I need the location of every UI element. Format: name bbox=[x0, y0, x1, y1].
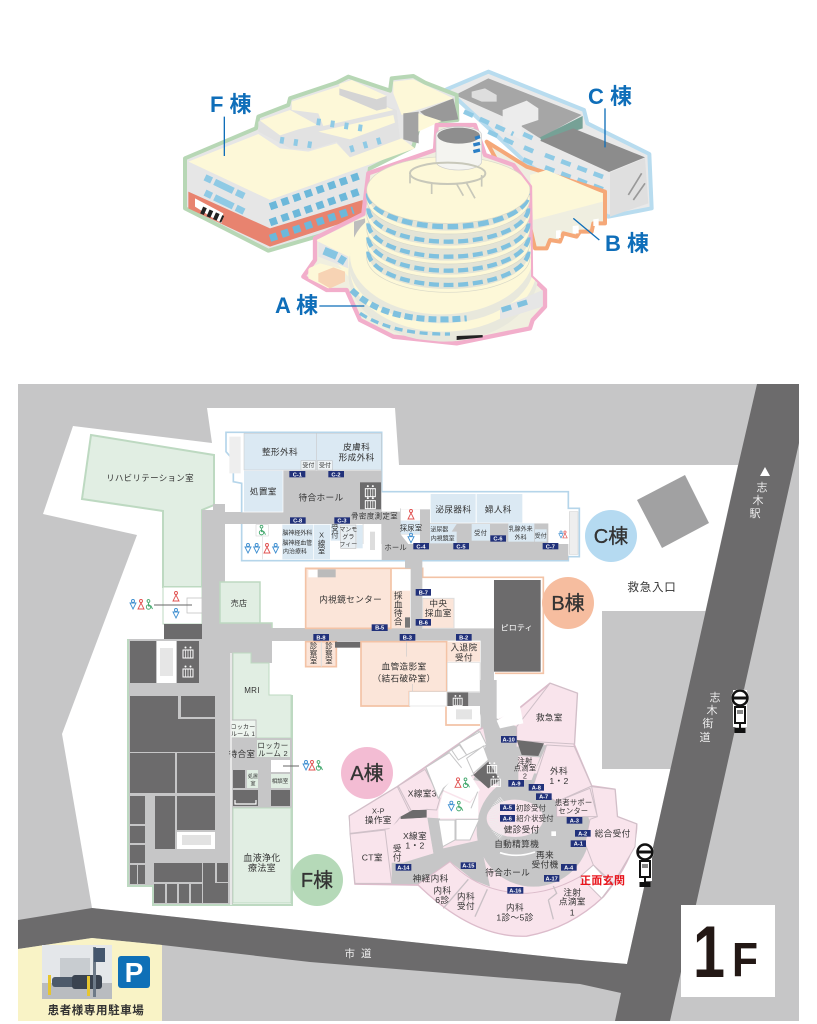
room: x-ray 3 bbox=[398, 769, 440, 812]
label: B wing: B 棟 bbox=[605, 231, 649, 256]
badge: C wing: C棟 bbox=[594, 525, 628, 548]
location labels: A-2 bbox=[578, 831, 587, 837]
badge: C wing bbox=[585, 510, 637, 562]
exam rooms: 診 bbox=[325, 641, 333, 650]
station direction: 木 bbox=[752, 494, 764, 507]
location labels: B-7 bbox=[419, 590, 428, 596]
location labels: C-2 bbox=[331, 472, 341, 478]
location labels: B-5 bbox=[375, 626, 384, 632]
room: orthopedics: 整形外科 bbox=[262, 446, 298, 457]
room: blood draw waiting: 合 bbox=[394, 616, 403, 627]
label: A wing: A 棟 bbox=[275, 293, 318, 318]
floor indicator bbox=[681, 905, 775, 997]
station direction: 志 bbox=[756, 481, 768, 494]
road name: city road: 市道 bbox=[344, 947, 378, 960]
room: central blood collection: 採血室 bbox=[425, 607, 452, 618]
exam rooms bbox=[306, 641, 362, 667]
badge: A wing bbox=[341, 747, 393, 799]
location labels: C-4 bbox=[416, 544, 426, 550]
waiting area bbox=[228, 738, 292, 808]
room: mammography and reception: マンモ bbox=[339, 526, 357, 533]
room labels in hall: 神経内科 bbox=[413, 872, 449, 883]
room labels in hall: 待合ホール bbox=[485, 866, 530, 877]
location labels: C-8 bbox=[293, 519, 302, 525]
building illustration bbox=[185, 72, 652, 343]
room: urology endoscopy bbox=[430, 524, 457, 543]
room: X-P control: X-P bbox=[372, 806, 385, 815]
rehabilitation room bbox=[82, 435, 214, 587]
room: central blood collection: 中央 bbox=[429, 598, 447, 609]
floor map background bbox=[18, 384, 799, 1021]
stairs east bbox=[569, 512, 578, 554]
reception bbox=[472, 524, 490, 541]
dialysis room: 療法室 bbox=[248, 862, 276, 873]
consultation room: 相談室 bbox=[272, 777, 289, 785]
location labels: A-9 bbox=[511, 781, 521, 787]
badge: A wing: A棟 bbox=[350, 762, 384, 785]
room: urology endoscopy: 内視鏡室 bbox=[431, 534, 455, 542]
room: X-P control bbox=[349, 787, 410, 833]
elevators bbox=[183, 646, 193, 677]
room labels in hall: 自動精算機 bbox=[494, 838, 539, 849]
room: X-P control: 操作室 bbox=[365, 814, 392, 825]
room: central blood collection bbox=[423, 598, 454, 628]
restrooms south bbox=[271, 760, 322, 772]
floor indicator: 1 bbox=[693, 912, 725, 993]
room: endoscopy center: 内視鏡センター bbox=[319, 593, 382, 604]
location labels: C-1 bbox=[293, 472, 302, 478]
panel: F wing bbox=[82, 435, 405, 905]
corridor bbox=[128, 504, 405, 905]
room labels in hall: 健診受付 bbox=[504, 823, 540, 834]
hall label: ホール bbox=[384, 543, 407, 552]
outdoor annex block bbox=[637, 475, 709, 548]
room: neurosurgery: 脳神経血管 bbox=[282, 539, 312, 547]
stairs bbox=[157, 641, 215, 849]
reception desks: 受付 bbox=[302, 462, 314, 470]
station direction: 駅 bbox=[750, 507, 760, 520]
room: blood draw waiting bbox=[392, 590, 410, 628]
room: surgery: 外科 bbox=[550, 765, 568, 776]
room: mammography and reception: 受 bbox=[331, 524, 339, 533]
location labels: A-8 bbox=[532, 785, 541, 791]
rehabilitation room: リハビリテーション室 bbox=[106, 473, 194, 483]
corridors bbox=[290, 560, 494, 730]
location labels bbox=[396, 736, 591, 894]
location labels: A-3 bbox=[570, 818, 579, 824]
room: general reception: 総合受付 bbox=[595, 827, 631, 838]
road name: Shiki Kaido: 道 bbox=[700, 730, 710, 744]
room: dermatology bbox=[317, 433, 381, 470]
room: x-ray bbox=[314, 525, 330, 559]
exam rooms: 室 bbox=[310, 657, 317, 666]
icon: traffic signal 1 bbox=[731, 689, 749, 733]
room: angiography: （結石破砕室） bbox=[373, 672, 435, 683]
room: breast surgery: 外科 bbox=[515, 533, 527, 541]
elevator and stairs bbox=[446, 692, 481, 725]
room: emergency bbox=[497, 683, 577, 744]
road name: Shiki Kaido bbox=[700, 691, 720, 744]
restrooms bbox=[438, 765, 480, 818]
room: mammography and reception: 付 bbox=[331, 531, 339, 540]
location labels: B-2 bbox=[459, 635, 468, 641]
building F illustration bbox=[185, 76, 458, 251]
building C illustration bbox=[447, 72, 652, 217]
location labels: B-8 bbox=[316, 635, 326, 641]
room: surgery: 1・2 bbox=[549, 776, 569, 786]
room: blood draw waiting: 待 bbox=[394, 607, 403, 618]
leader lines bbox=[224, 108, 605, 306]
room: x-ray: 線 bbox=[318, 539, 326, 548]
restrooms west bbox=[243, 525, 282, 559]
exam rooms: 察 bbox=[325, 649, 333, 658]
room: injection 2: 2 bbox=[523, 771, 527, 780]
room: gynecology: 婦人科 bbox=[485, 504, 512, 515]
room: neurosurgery bbox=[282, 525, 313, 559]
location labels: A-4 bbox=[564, 865, 574, 871]
room: x-ray 1 and 2 bbox=[400, 818, 433, 862]
room: patient support center: センター bbox=[558, 807, 588, 816]
locker room 1: ロッカー bbox=[230, 724, 256, 731]
room: blood draw waiting: 採 bbox=[394, 590, 403, 601]
room: x-ray: X bbox=[319, 531, 324, 540]
room: admissions: 受付 bbox=[455, 651, 473, 662]
main entrance bbox=[580, 865, 625, 898]
room: injection 2: 点滴室 bbox=[514, 764, 536, 773]
location labels: A-7 bbox=[539, 795, 548, 801]
elevators bbox=[473, 762, 500, 788]
room labels in hall: 初診受付 bbox=[516, 803, 546, 812]
restrooms north bbox=[130, 587, 202, 639]
lower ring of rooms bbox=[418, 862, 603, 936]
room labels in hall: 内科 bbox=[457, 891, 475, 902]
reception desks: 受付 bbox=[319, 462, 331, 470]
room: breast surgery: 乳腺外来 bbox=[509, 525, 533, 533]
location labels: C-3 bbox=[337, 519, 347, 525]
restroom and urine room bbox=[400, 509, 422, 544]
building A illustration bbox=[303, 125, 545, 343]
room: urology bbox=[431, 494, 476, 523]
room labels in hall: 1診〜5診 bbox=[496, 912, 534, 923]
label: F wing: F 棟 bbox=[210, 92, 252, 117]
floor indicator: F bbox=[732, 934, 758, 987]
restroom and urine room: 採尿室 bbox=[400, 523, 422, 532]
parking sign bbox=[118, 956, 150, 988]
badge: F wing bbox=[291, 854, 343, 906]
parking area bbox=[18, 938, 162, 1021]
elevators bbox=[360, 482, 381, 509]
dialysis room: 血液浄化 bbox=[243, 852, 281, 863]
location labels: A-6 bbox=[503, 816, 512, 822]
label: C wing: C 棟 bbox=[588, 84, 632, 109]
room: mammography and reception: グラ bbox=[342, 533, 354, 541]
location labels: A-15 bbox=[462, 864, 474, 870]
dark room bbox=[401, 810, 427, 819]
gray corridors bbox=[225, 471, 568, 560]
locker room 2: ロッカー bbox=[257, 741, 289, 750]
MRI room: MRI bbox=[244, 686, 260, 695]
room: reception: 受 bbox=[393, 842, 402, 853]
locker room 2 bbox=[257, 740, 290, 758]
room: injection 2: 注射 bbox=[517, 756, 533, 765]
room: urology: 泌尿器科 bbox=[435, 504, 471, 515]
locker room 1: ルーム 1 bbox=[231, 731, 256, 738]
outer outline bbox=[391, 568, 543, 673]
room: orthopedics bbox=[244, 433, 317, 470]
room: breast surgery bbox=[508, 523, 534, 542]
white room bbox=[447, 663, 480, 692]
stairs bbox=[363, 524, 381, 559]
dialysis room bbox=[233, 808, 291, 903]
room: CT: CT室 bbox=[362, 851, 383, 862]
room: x-ray: 室 bbox=[318, 547, 325, 556]
panel: A wing bbox=[349, 680, 637, 936]
location labels: A-14 bbox=[397, 865, 410, 871]
room labels in hall: 受付 bbox=[457, 900, 475, 911]
shop bbox=[220, 582, 272, 628]
reception desks bbox=[301, 461, 332, 470]
room labels in hall: 内科 bbox=[506, 902, 524, 913]
exam rooms: 室 bbox=[325, 657, 333, 666]
road name: Shiki Kaido: 街 bbox=[702, 716, 714, 730]
outer outline bbox=[349, 683, 637, 936]
badge: B wing: B棟 bbox=[551, 592, 585, 615]
room: mammography and reception: フィー bbox=[339, 541, 357, 548]
room: reception bbox=[386, 820, 403, 863]
badge: B wing bbox=[542, 577, 594, 629]
location labels bbox=[313, 589, 472, 641]
room: urology endoscopy: 泌尿器 bbox=[430, 526, 448, 534]
room: neurosurgery: 内治療科 bbox=[283, 547, 307, 555]
location labels: C-5 bbox=[456, 544, 466, 550]
road name: Shiki Kaido: 志 bbox=[710, 691, 720, 704]
panel: B wing bbox=[290, 560, 543, 730]
pilotis bbox=[494, 580, 541, 672]
parking photo bbox=[42, 945, 112, 999]
reception: 受付 bbox=[474, 528, 488, 537]
waiting area: 待合室 bbox=[229, 749, 255, 759]
location labels: B-3 bbox=[403, 635, 412, 641]
parking sign: P bbox=[125, 957, 143, 988]
exam rooms: 察 bbox=[310, 649, 318, 658]
location labels: A-1 bbox=[574, 842, 583, 848]
icon: traffic signal 2 bbox=[636, 843, 654, 887]
main entrance: 正面玄関 bbox=[580, 873, 625, 887]
treatment room: 室 bbox=[250, 780, 256, 787]
room: x-ray 1 and 2: 1・2 bbox=[405, 841, 425, 851]
room labels in hall: 内科 bbox=[433, 885, 451, 896]
parking caption: 患者様専用駐車場 bbox=[48, 1003, 144, 1017]
room labels in hall: 点滴室 bbox=[559, 896, 586, 907]
location labels: A-16 bbox=[509, 888, 521, 894]
room: general reception bbox=[585, 787, 637, 883]
location labels: C-7 bbox=[546, 544, 555, 550]
station direction bbox=[750, 467, 770, 520]
panel: C wing bbox=[225, 432, 579, 561]
dark service blocks bbox=[130, 641, 290, 903]
bone density label: 骨密度測定室 bbox=[351, 512, 398, 521]
room: CT bbox=[350, 830, 392, 883]
room: blood draw waiting: 血 bbox=[394, 598, 403, 609]
room labels in hall: 紹介状受付 bbox=[516, 814, 554, 823]
room: admissions: 入退院 bbox=[451, 642, 477, 652]
room: x-ray 3: X線室3 bbox=[408, 788, 437, 799]
room: neurosurgery: 脳神経外科 bbox=[282, 529, 312, 537]
waiting hall label: 待合ホール bbox=[299, 491, 343, 502]
location labels: B-6 bbox=[419, 620, 428, 626]
dark service room bbox=[517, 740, 544, 756]
room: treatment bbox=[244, 471, 283, 512]
room: surgery bbox=[533, 745, 592, 802]
south wing outline bbox=[128, 639, 292, 905]
central atrium bbox=[487, 800, 556, 855]
badge: F wing: F棟 bbox=[301, 869, 333, 892]
room: x-ray 1 and 2: X線室 bbox=[403, 830, 427, 841]
treatment room bbox=[247, 770, 258, 788]
reception bbox=[535, 529, 547, 542]
exam rooms: 診 bbox=[310, 641, 318, 650]
consultation room bbox=[271, 774, 290, 788]
pilotis: ピロティ bbox=[501, 624, 533, 633]
rooftop sign tower bbox=[410, 127, 485, 198]
treatment room: 処置 bbox=[248, 773, 258, 780]
locker room 2: ルーム 2 bbox=[258, 749, 288, 758]
restroom east bbox=[558, 529, 568, 542]
road name: Shiki Kaido: 木 bbox=[706, 704, 718, 717]
locker room 1 bbox=[230, 720, 256, 738]
location labels bbox=[289, 471, 558, 550]
stairs bbox=[229, 437, 241, 473]
location labels: A-17 bbox=[546, 876, 558, 882]
room: injection 2 bbox=[514, 756, 540, 780]
room: patient support center bbox=[555, 788, 600, 817]
room labels in hall: 注射 bbox=[563, 886, 581, 897]
room: angiography: 血管造影室 bbox=[382, 661, 426, 672]
location labels: C-6 bbox=[493, 537, 503, 543]
room dividers bbox=[443, 877, 602, 919]
building B illustration bbox=[487, 142, 605, 248]
room: patient support center: 患者サポート bbox=[555, 798, 600, 807]
road network bbox=[18, 384, 799, 1021]
location labels: A-5 bbox=[503, 806, 512, 812]
room labels in hall: 再来 bbox=[536, 850, 554, 860]
shop: 売店 bbox=[231, 598, 247, 608]
reception: 受付 bbox=[535, 532, 547, 540]
room labels in hall bbox=[413, 803, 586, 923]
room labels in hall: 1 bbox=[570, 907, 575, 917]
emergency entrance label: 救急入口 bbox=[627, 580, 677, 594]
room: reception: 付 bbox=[393, 852, 402, 862]
room: admissions bbox=[447, 642, 480, 662]
room: treatment: 処置室 bbox=[250, 486, 277, 497]
room: emergency: 救急室 bbox=[536, 712, 563, 723]
MRI room bbox=[233, 653, 291, 738]
room: mammography and reception bbox=[331, 524, 363, 559]
central hall and corridors bbox=[392, 680, 590, 887]
room: dermatology: 皮膚科 bbox=[343, 441, 370, 452]
location labels: A-10 bbox=[503, 737, 515, 743]
white rooms bbox=[382, 493, 567, 523]
room: endoscopy center bbox=[306, 568, 391, 628]
room: dermatology: 形成外科 bbox=[339, 451, 375, 462]
room: gynecology bbox=[477, 494, 522, 523]
white utility rooms bbox=[426, 731, 488, 847]
room: angiography bbox=[361, 642, 447, 706]
room labels in hall: 6診 bbox=[435, 894, 449, 905]
room labels in hall: 受付機 bbox=[532, 858, 558, 869]
